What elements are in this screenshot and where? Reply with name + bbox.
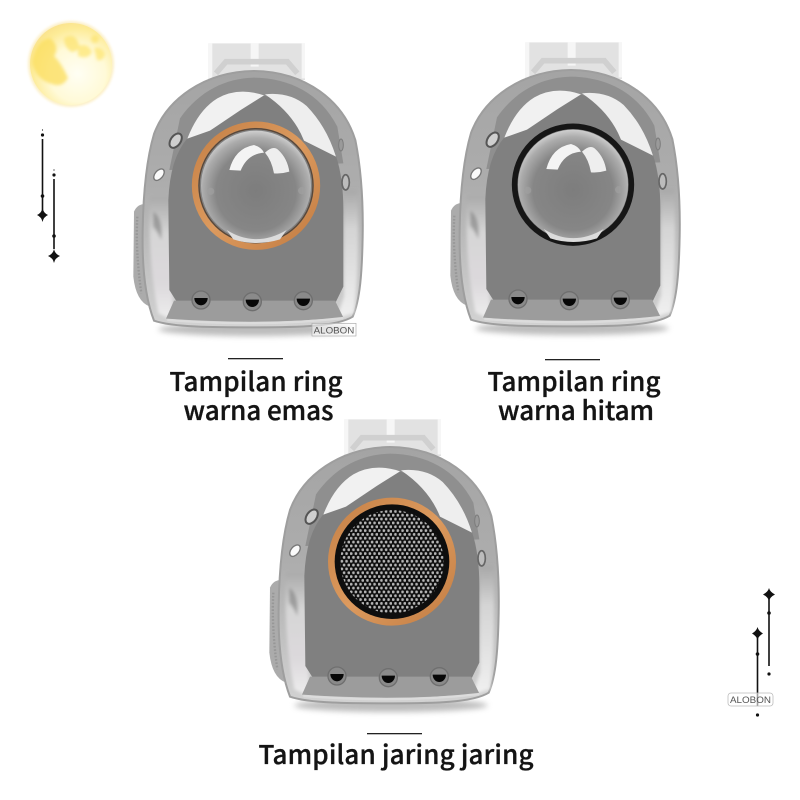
caption: mesh: Tampilan jaring jaring <box>258 735 534 772</box>
icon: hanging stars, bottom right <box>752 588 775 717</box>
black ring <box>515 126 631 243</box>
caption: black ring: Tampilan ring <box>488 362 660 399</box>
transparent bubble window <box>518 130 628 242</box>
caption: gold ring: Tampilan ring <box>170 362 342 399</box>
panel: backpack with mesh window <box>269 419 499 712</box>
panel: backpack with black ring <box>450 42 680 335</box>
panel: backpack with gold ring <box>133 43 363 336</box>
copper ring and mesh window <box>328 498 456 626</box>
watermark badge: ALOBON <box>314 325 354 335</box>
transparent bubble window <box>201 131 311 243</box>
caption: gold ring <box>170 358 342 428</box>
watermark badge, bottom right: ALOBON <box>730 695 771 706</box>
watermark badge <box>312 323 356 336</box>
caption: gold ring: warna emas <box>184 391 334 428</box>
icon: yellow full moon <box>28 21 114 107</box>
gold ring <box>195 125 317 247</box>
caption: black ring <box>488 359 660 428</box>
icon: hanging stars, top left <box>37 129 60 263</box>
caption: black ring: warna hitam <box>498 391 654 428</box>
